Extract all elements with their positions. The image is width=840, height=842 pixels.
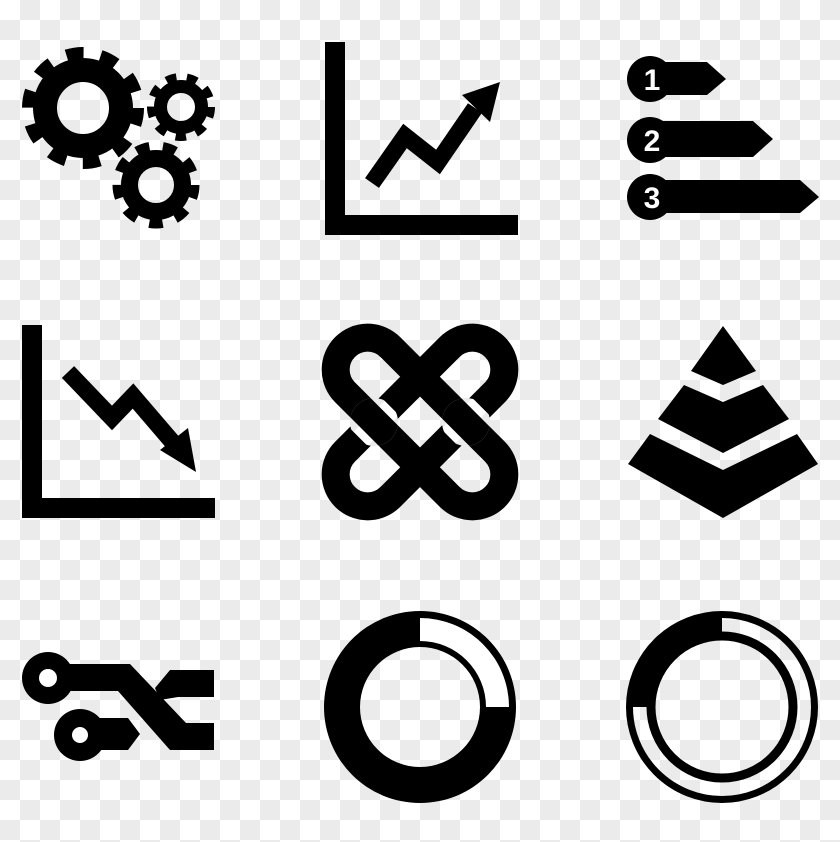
icon: interlocked knot: [322, 324, 518, 520]
icon: donut chart 75%: [324, 611, 516, 803]
icon: numbered list: 1: [644, 64, 660, 97]
icon: circuit: [22, 652, 214, 761]
icon: numbered list: 3: [644, 182, 660, 215]
icon: rising line chart: [325, 42, 518, 235]
icon: gears: [28, 53, 211, 224]
icon: numbered list: [627, 56, 819, 220]
icon: numbered list: 2: [644, 125, 660, 158]
icon: falling line chart: [22, 325, 215, 518]
icon: pyramid: [628, 326, 818, 518]
icon: donut chart 25%: [630, 614, 814, 800]
